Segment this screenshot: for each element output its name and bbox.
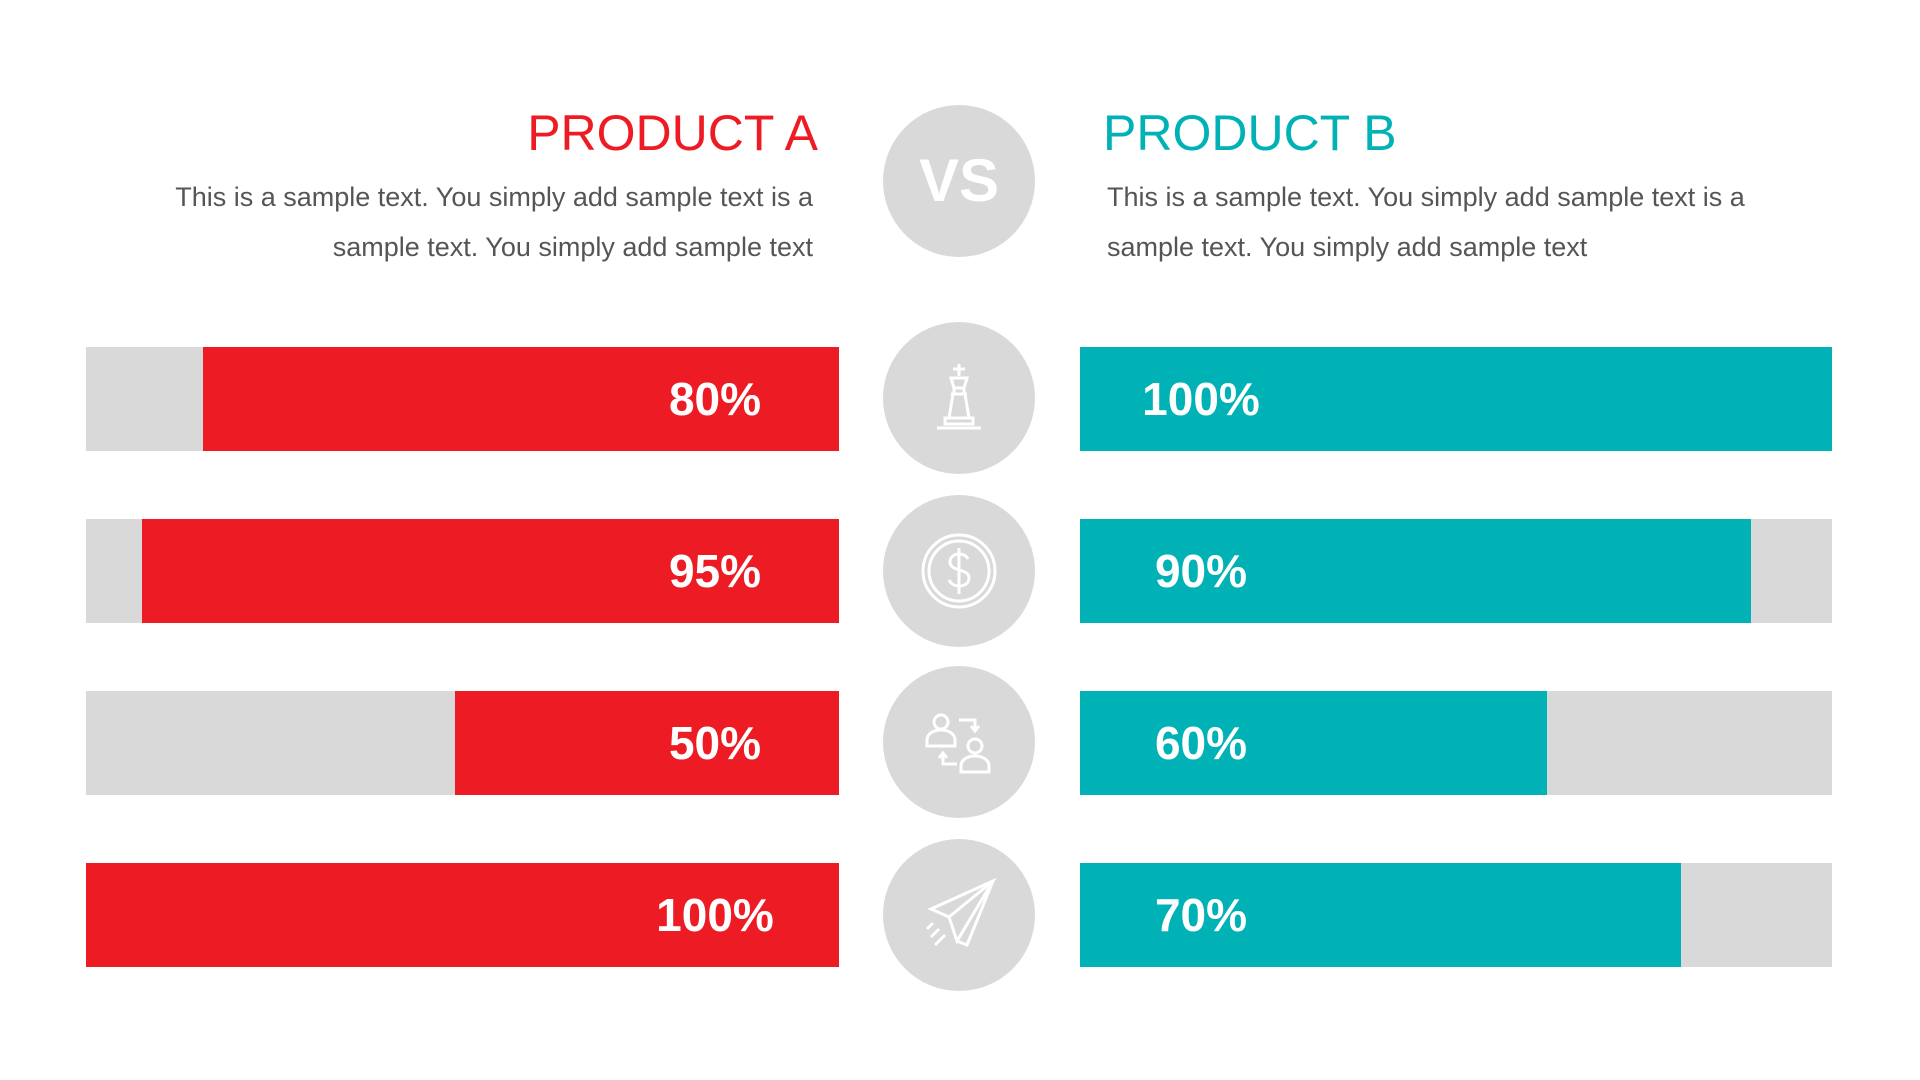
bar: B row 1 (1080, 347, 1832, 451)
bar: A row 1 (86, 347, 839, 451)
bar: B row 1: 100% (1142, 373, 1260, 425)
bar: A row 1: 80% (669, 373, 761, 425)
title: product A: PRODUCT A (527, 105, 818, 161)
icon: people exchange (883, 666, 1035, 818)
bar: A row 3: 50% (669, 717, 761, 769)
bar: A row 4: 100% (656, 889, 774, 941)
text: product A description: This is a sample text. You simply add sample text is a sample text. You simply add sample text (175, 182, 813, 262)
icon: paper plane (883, 839, 1035, 991)
icon: dollar coin (883, 495, 1035, 647)
bar: B row 3 (1080, 691, 1832, 795)
bar: B row 2: 90% (1155, 545, 1247, 597)
title: product B: PRODUCT B (1103, 105, 1397, 161)
bar: A row 4 (86, 863, 839, 967)
bar: B row 3: 60% (1155, 717, 1247, 769)
bar: B row 4: 70% (1155, 889, 1247, 941)
VS circle (883, 105, 1035, 257)
bar: A row 2: 95% (669, 545, 761, 597)
VS circle: VS (919, 147, 999, 214)
bar: B row 2 (1080, 519, 1832, 623)
icon: chess king (883, 322, 1035, 474)
bar: A row 3 (86, 691, 839, 795)
bar: A row 2 (86, 519, 839, 623)
text: product B description: This is a sample text. You simply add sample text is a sample text. You simply add sample text (1107, 182, 1745, 262)
bar: B row 4 (1080, 863, 1832, 967)
